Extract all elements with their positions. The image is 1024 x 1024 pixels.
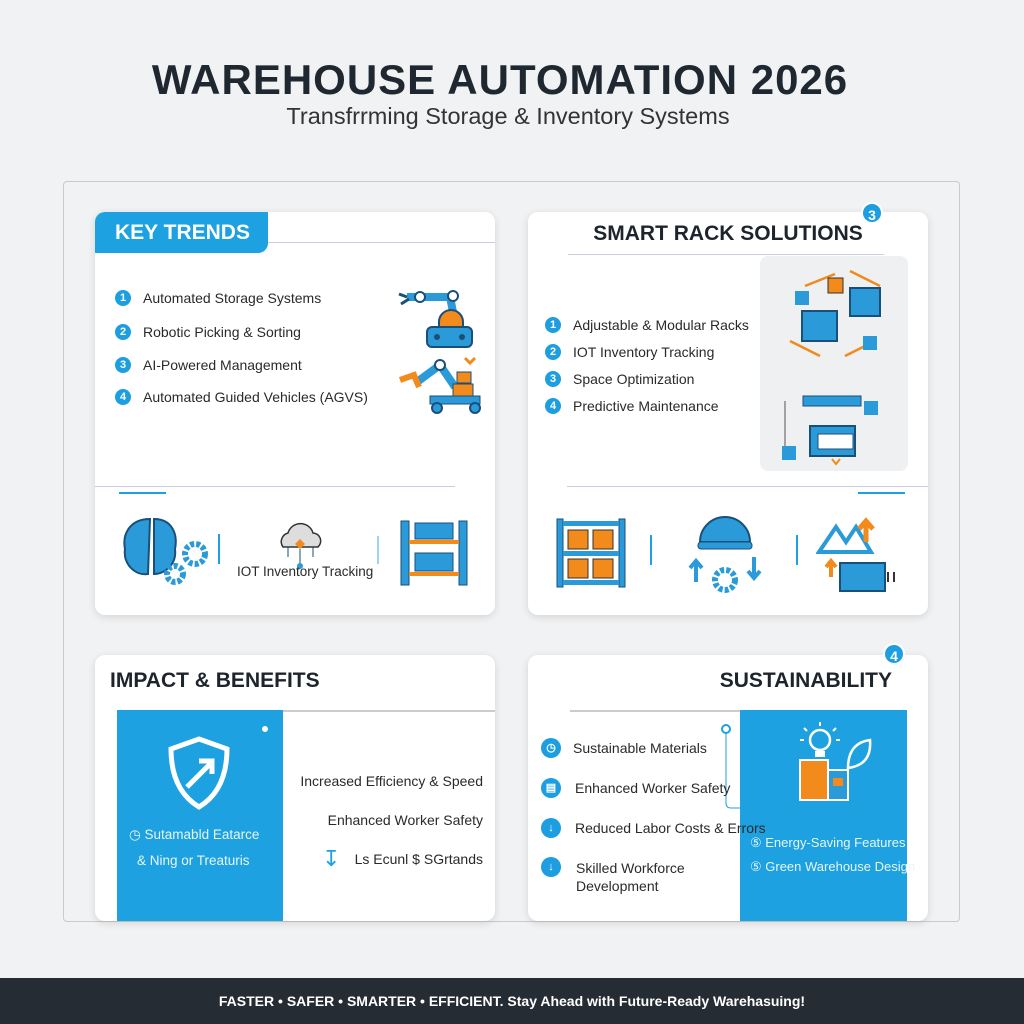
icon: robot arms [398, 290, 481, 414]
list: Automated Storage Systems [143, 290, 321, 306]
diagram image [760, 256, 908, 471]
panel: key trends [95, 212, 495, 615]
IoT label: IOT Inventory Tracking [237, 564, 373, 579]
benefits list: Ls Ecunl $ SGrtands [355, 851, 483, 867]
blue block [740, 710, 907, 921]
list: 1 [120, 292, 126, 304]
list: 4 [120, 391, 126, 403]
icon: monitor arrows [816, 517, 895, 592]
list: Robotic Picking & Sorting [143, 324, 301, 340]
heading: SUSTAINABILITY [720, 669, 892, 692]
icon: rack [400, 520, 468, 586]
sustainability list: Enhanced Worker Safety [575, 780, 730, 796]
blue block: ⑤ Energy-Saving Features [750, 835, 905, 850]
outer frame [63, 181, 960, 922]
subtitle: Transfrrming Storage & Inventory Systems [286, 103, 730, 129]
sustainability list: Reduced Labor Costs & Errors [575, 820, 766, 836]
icon: cloud [280, 522, 322, 569]
list: 2 [550, 346, 556, 358]
sustainability list [541, 738, 766, 894]
list: IOT Inventory Tracking [573, 344, 714, 360]
heading tab [95, 212, 268, 253]
list [115, 290, 368, 405]
icon: brain gears [123, 518, 208, 585]
icon: bulb building leaf [799, 722, 872, 801]
sustainability list: ◷ [546, 742, 556, 754]
list: 3 [550, 373, 556, 385]
list: Automated Guided Vehicles (AGVS) [143, 389, 368, 405]
benefits list: ↧ [322, 846, 340, 871]
panel: impact & benefits [95, 655, 495, 921]
list: 4 [550, 400, 556, 412]
badge 3 [861, 202, 883, 224]
sustainability list: ▤ [546, 782, 556, 794]
sustainability list: Sustainable Materials [573, 740, 707, 756]
list: Adjustable & Modular Racks [573, 317, 749, 333]
icon: helmet gear [688, 516, 762, 593]
benefits list: Enhanced Worker Safety [328, 812, 483, 828]
panel: sustainability [528, 655, 928, 921]
icon: shield arrow [168, 736, 230, 810]
icon: shelf with boxes [556, 518, 626, 588]
benefits list: Increased Efficiency & Speed [300, 773, 483, 789]
footer: FASTER • SAFER • SMARTER • EFFICIENT. Stay Ahead with Future-Ready Warehasuing! [219, 993, 805, 1009]
list: 1 [550, 319, 556, 331]
heading tab: KEY TRENDS [115, 221, 250, 244]
benefits list [300, 773, 483, 871]
list: AI-Powered Management [143, 357, 302, 373]
list: Predictive Maintenance [573, 398, 719, 414]
title: WAREHOUSE AUTOMATION 2026 [152, 56, 848, 103]
heading: IMPACT & BENEFITS [110, 669, 320, 692]
badge 4: 4 [890, 648, 898, 664]
list: Space Optimization [573, 371, 694, 387]
list: 3 [120, 359, 126, 371]
badge 4 [883, 643, 905, 665]
sustainability list: Skilled Workforce [576, 860, 685, 876]
blue block: & Ning or Treaturis [137, 853, 250, 868]
blue block: ⑤ Green Warehouse Design [750, 859, 915, 874]
footer [0, 978, 1024, 1024]
sustainability list: ↓ [548, 861, 554, 873]
blue block [117, 710, 283, 921]
list [545, 317, 749, 414]
badge 3: 3 [868, 207, 876, 223]
sustainability list: Development [576, 878, 658, 894]
panel: smart rack solutions [528, 212, 928, 615]
heading: SMART RACK SOLUTIONS [593, 222, 863, 245]
sustainability list: ↓ [548, 822, 554, 834]
blue block: ◷ Sutamabld Eatarce [129, 827, 259, 842]
list: 2 [120, 326, 126, 338]
